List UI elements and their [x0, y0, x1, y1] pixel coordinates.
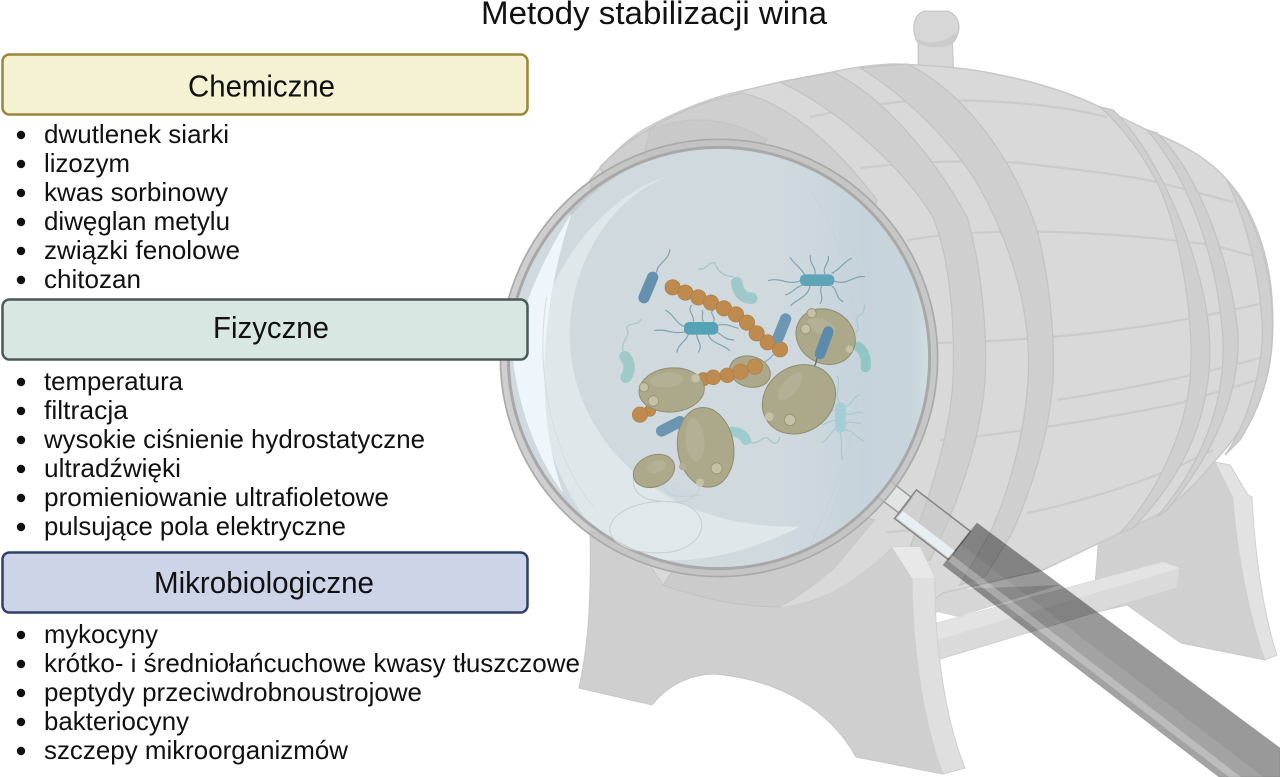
- pale curved bacterium: [698, 263, 752, 298]
- illustration: wine barrel on a stand: [579, 11, 1277, 774]
- list: microbiological methods: krótko- i średniołańcuchowe kwasy tłuszczowe: [44, 648, 580, 678]
- list: microbiological methods: [17, 619, 580, 765]
- list: physical methods: [17, 366, 425, 541]
- heading box: Mikrobiologiczne: Mikrobiologiczne: [154, 566, 374, 600]
- brown chain second segment: [632, 359, 763, 422]
- list: chemical methods: lizozym: [44, 148, 130, 178]
- blue rod bacterium: [644, 249, 670, 298]
- front stand: [579, 500, 965, 774]
- blue rod lower: [662, 422, 680, 431]
- panel: microbiological methods: [2, 552, 580, 765]
- list: chemical methods: chitozan: [44, 264, 141, 294]
- list: physical methods: filtracja: [44, 395, 129, 425]
- yeast cell lower left: [628, 448, 680, 493]
- list: physical methods: promieniowanie ultrafioletowe: [44, 482, 389, 512]
- barrel hoops: [600, 64, 1273, 585]
- barrel staves: [810, 100, 1263, 533]
- yeast cell centre small: [726, 351, 774, 392]
- lower teal bacterium: [732, 432, 780, 443]
- list: microbiological methods: mykocyny: [44, 619, 158, 649]
- pale curved bacterium right: [855, 305, 866, 367]
- pale curved bacterium left: [623, 318, 642, 377]
- dark rod over yeast: [804, 332, 828, 382]
- stand cross bar: [930, 562, 1180, 662]
- barrel bung: [914, 11, 959, 68]
- barrel body: [590, 64, 1273, 620]
- list: physical methods: wysokie ciśnienie hydrostatyczne: [43, 424, 425, 454]
- blue rod bacterium centre: [762, 319, 786, 365]
- list: physical methods: ultradźwięki: [44, 453, 181, 483]
- panel: physical methods: [2, 300, 528, 541]
- heading box: Mikrobiologiczne: [2, 552, 528, 612]
- pale flagellated rod: [819, 376, 864, 460]
- heading box: Fizyczne: Fizyczne: [213, 311, 329, 345]
- yeast cell centre large: [672, 404, 739, 491]
- panel: chemical methods: [2, 54, 528, 294]
- list: chemical methods: związki fenolowe: [44, 235, 240, 265]
- list: physical methods: pulsujące pola elektryczne: [44, 511, 346, 541]
- list: microbiological methods: peptydy przeciwdrobnoustrojowe: [44, 677, 422, 707]
- lens: [500, 137, 938, 577]
- yeast cell left: [637, 365, 706, 415]
- list: microbiological methods: bakteriocyny: [44, 706, 189, 736]
- list: chemical methods: kwas sorbinowy: [44, 177, 228, 207]
- faint cell outlines: [610, 463, 702, 553]
- brown bead chain: [665, 280, 788, 357]
- heading box: Fizyczne: [2, 300, 528, 360]
- flagellated rod bacterium upper right: [768, 255, 865, 306]
- heading box: Chemiczne: Chemiczne: [188, 70, 335, 104]
- illustration: magnifying glass: [500, 137, 1280, 777]
- yeast cell right lower: [749, 351, 849, 448]
- flagellated rod bacterium centre: [654, 305, 738, 353]
- heading box: Chemiczne: [2, 54, 528, 114]
- magnifier handle: [873, 473, 1280, 777]
- microbes: [623, 249, 866, 493]
- back stand: [1093, 462, 1277, 660]
- list: physical methods: temperatura: [44, 366, 184, 396]
- list: microbiological methods: szczepy mikroorganizmów: [44, 735, 348, 765]
- list: chemical methods: diwęglan metylu: [44, 206, 230, 236]
- list: chemical methods: [17, 119, 240, 294]
- yeast cell right upper: [786, 298, 866, 376]
- list: chemical methods: dwutlenek siarki: [44, 119, 229, 149]
